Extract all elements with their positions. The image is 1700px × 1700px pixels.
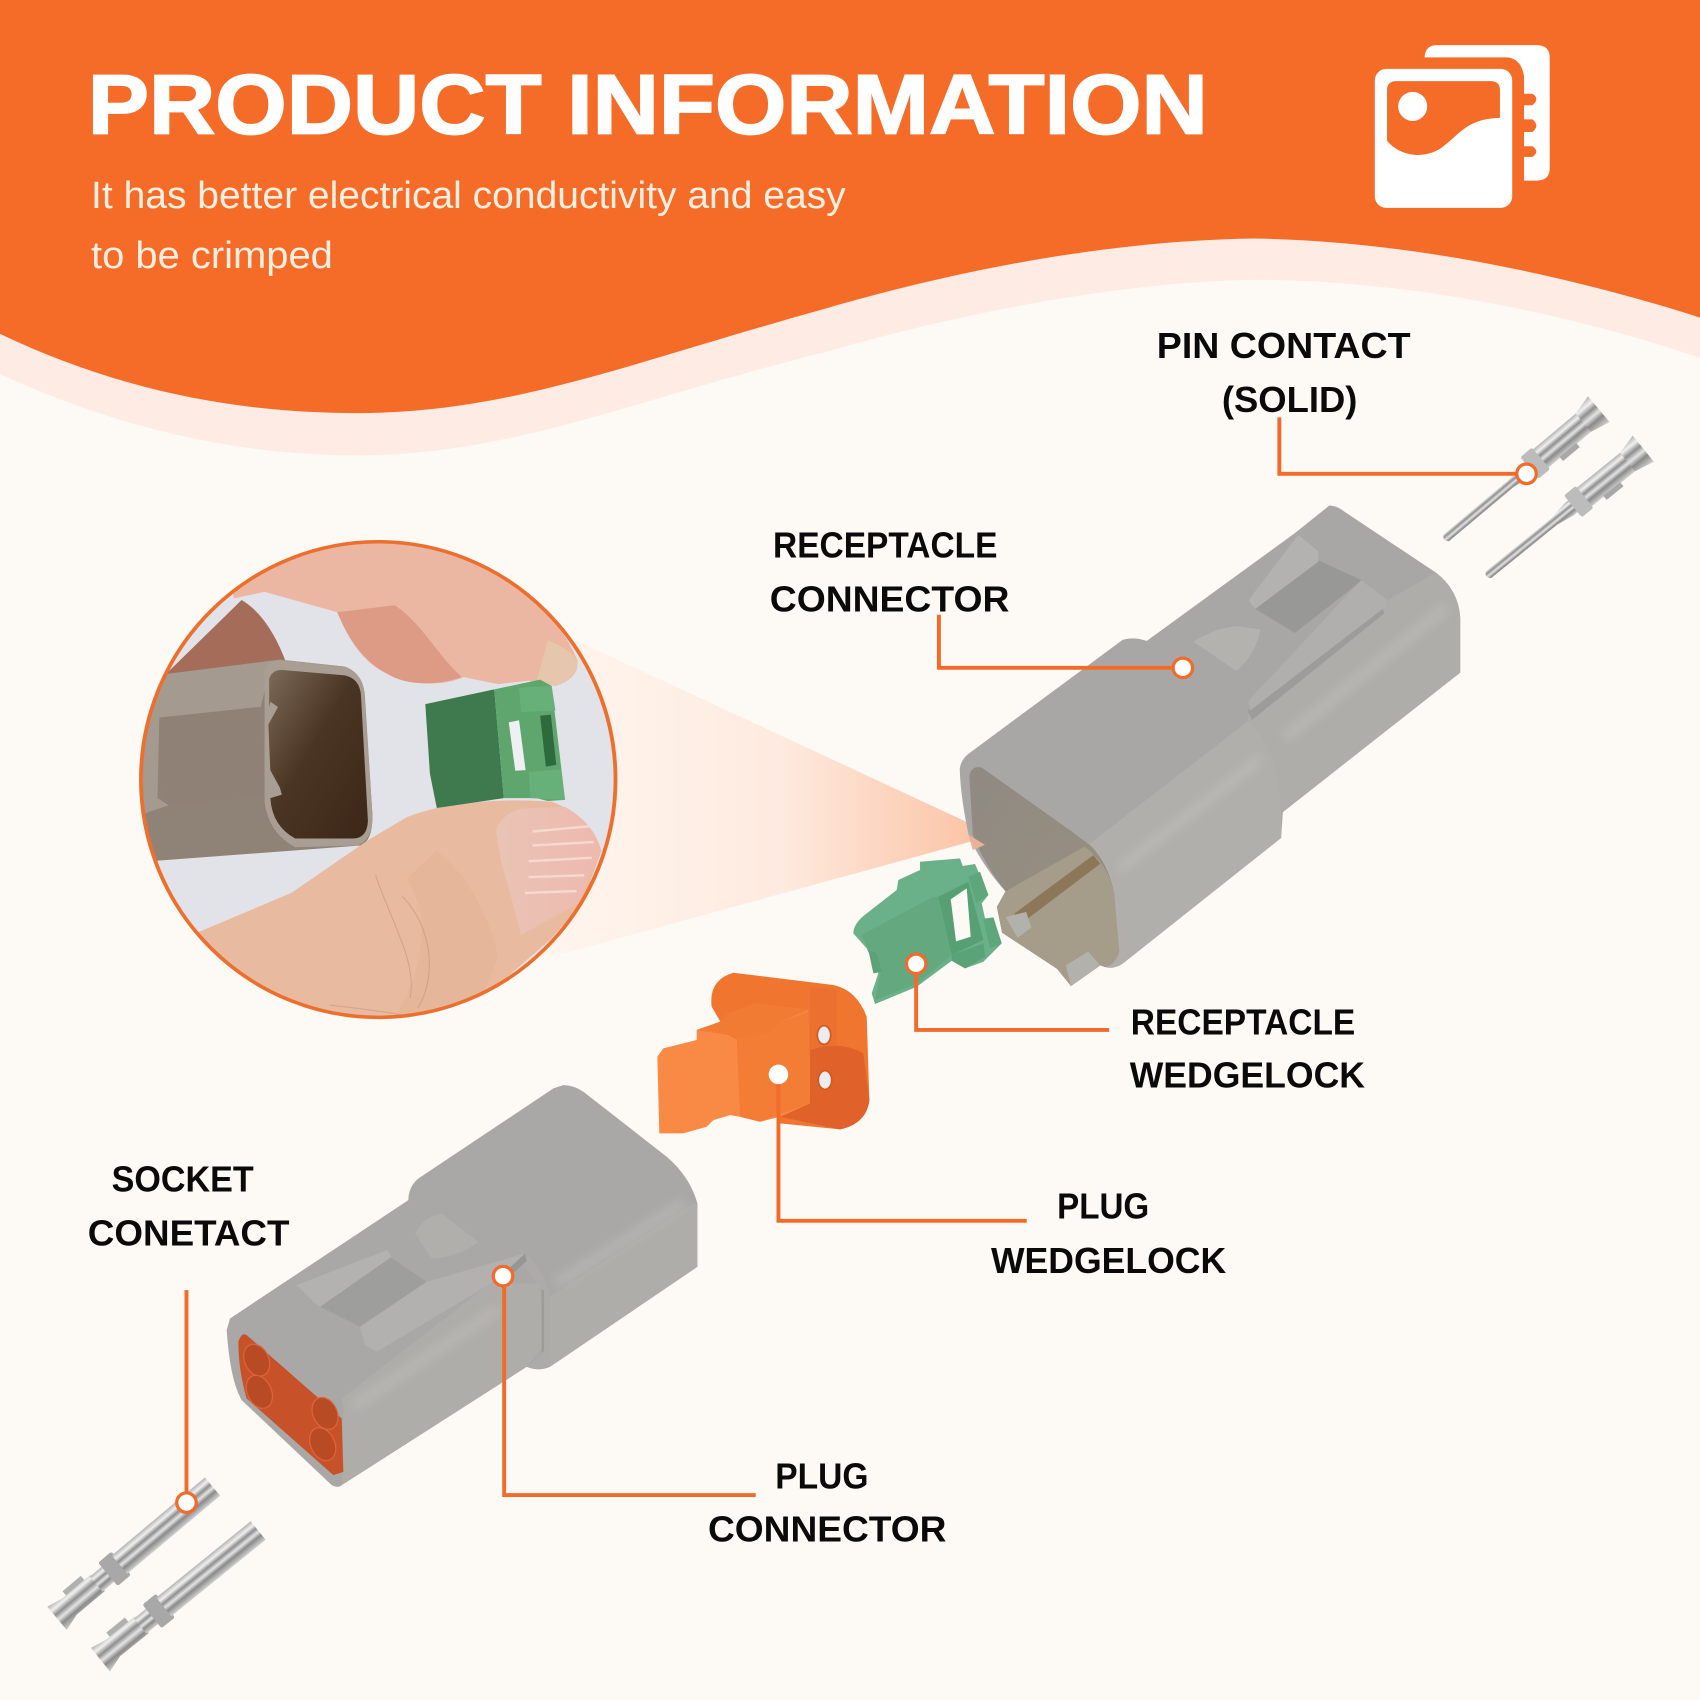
magnifier cone (542, 640, 976, 960)
label: socket contact: CONETACT (88, 1213, 289, 1254)
label: plug wedgelock: PLUG (1057, 1186, 1149, 1227)
subtitle (91, 175, 846, 277)
label: pin contact: PIN CONTACT (1157, 325, 1411, 366)
title: PRODUCT INFORMATION (88, 56, 1208, 151)
cone tip in cavity (968, 834, 985, 850)
connector in hand (134, 660, 372, 861)
green wedge held (425, 689, 504, 808)
seal holes (239, 1340, 343, 1465)
label: receptacle wedgelock: RECEPTACLE (1131, 1001, 1355, 1042)
soft highlights (1119, 607, 1446, 869)
label: socket contact (88, 1159, 289, 1254)
triangle mark (415, 1213, 478, 1258)
pin contacts (1433, 396, 1654, 589)
top finger (230, 532, 578, 686)
plug connector (227, 1085, 697, 1487)
label: pin contact: (SOLID) (1222, 379, 1357, 420)
label: receptacle wedgelock: WEDGELOCK (1130, 1054, 1365, 1095)
label: receptacle connector (770, 524, 1009, 619)
body outline (960, 506, 1460, 986)
thumb creases (330, 875, 429, 1016)
lens ring (141, 542, 616, 1017)
leader: plug wedgelock (769, 1065, 1027, 1221)
icon: product image cards (1375, 45, 1550, 208)
label: receptacle wedgelock (1130, 1001, 1365, 1095)
receptacle wedgelock (green) (853, 858, 1002, 1004)
plug wedgelock (orange) (657, 973, 869, 1133)
header wave: pale band (0, 217, 1700, 455)
thumb (192, 800, 601, 1033)
label: socket contact: SOCKET (112, 1159, 254, 1200)
leader: receptacle connector (939, 615, 1193, 678)
thumb nail (496, 807, 601, 935)
latch slot (320, 1257, 427, 1327)
label: receptacle connector: CONNECTOR (770, 578, 1009, 619)
subtitle: to be crimped (91, 235, 333, 277)
leader: plug connector (493, 1266, 756, 1495)
latch slot (1255, 561, 1362, 633)
label: plug connector: PLUG (775, 1456, 868, 1497)
collar side face (1088, 721, 1281, 968)
label: plug wedgelock (991, 1186, 1226, 1281)
leader: receptacle wedgelock (906, 954, 1109, 1030)
socket contacts (46, 1474, 268, 1671)
label: receptacle connector: RECEPTACLE (773, 524, 997, 565)
body outline (227, 1085, 697, 1487)
leader: socket contact (177, 1290, 196, 1512)
leader: pin contact (1279, 417, 1536, 484)
side faces (342, 1283, 543, 1485)
label: plug connector: CONNECTOR (708, 1509, 946, 1550)
left finger behind connector (168, 600, 286, 674)
cavity (969, 767, 1119, 986)
receptacle connector (960, 506, 1460, 986)
label: plug wedgelock: WEDGELOCK (991, 1240, 1226, 1281)
subtitle: It has better electrical conductivity and easy (91, 175, 846, 217)
circular close-up photo (134, 532, 624, 1033)
latch strips (1248, 535, 1318, 609)
orange seal face (238, 1334, 343, 1475)
rear side face (1248, 573, 1460, 812)
latch strips (297, 1250, 392, 1307)
label: pin contact (1157, 325, 1411, 420)
label: plug connector (708, 1456, 946, 1550)
soft highlights (353, 1203, 683, 1407)
wedge holes (817, 1026, 831, 1044)
triangle mark (1193, 626, 1260, 671)
header wave: orange banner (0, 0, 1700, 413)
